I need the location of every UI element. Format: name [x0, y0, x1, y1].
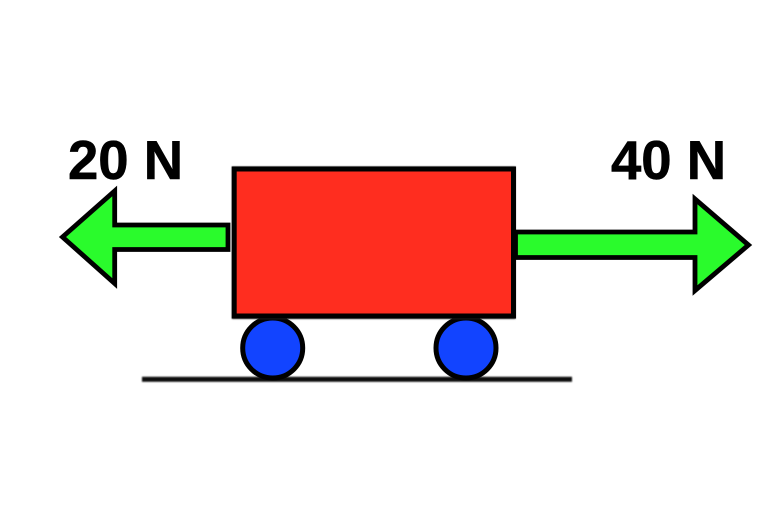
wheel: right: [436, 318, 496, 378]
cart body: [234, 169, 513, 316]
label: 40 N: 40 N: [611, 130, 726, 191]
cart shadow edge: [232, 166, 516, 319]
arrow: 40 N right force: [516, 199, 748, 290]
label: 20 N: 20 N: [68, 130, 183, 191]
ground line: [142, 377, 572, 382]
wheel: left: [243, 318, 303, 378]
arrow: 20 N left force: [62, 191, 228, 284]
